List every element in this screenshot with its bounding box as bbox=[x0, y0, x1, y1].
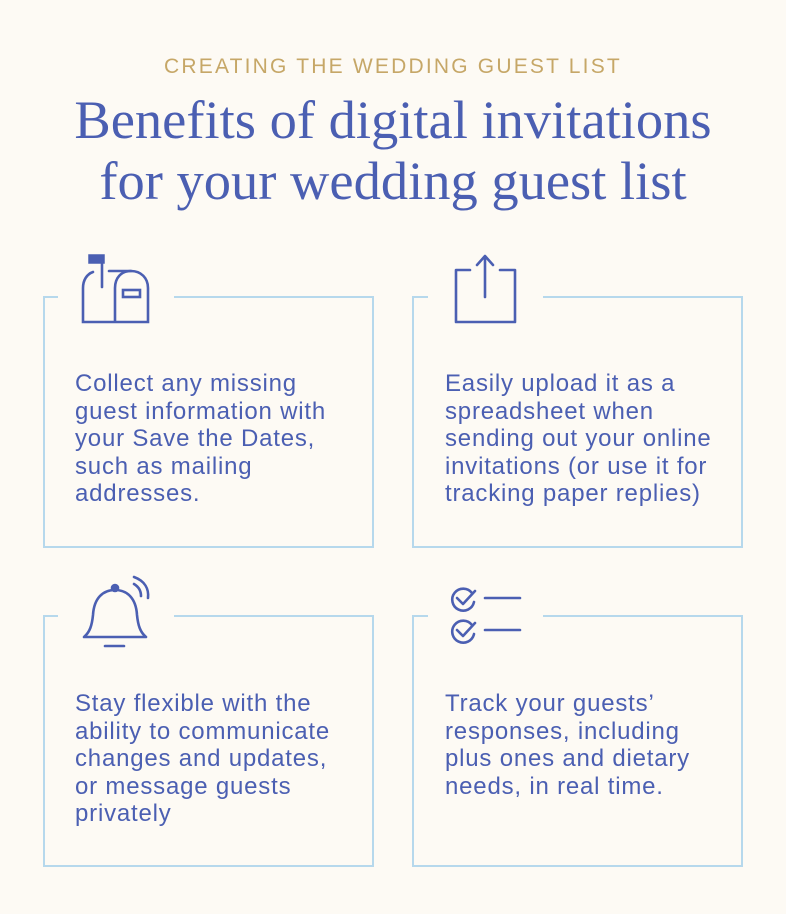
text: collect info bbox=[75, 370, 326, 507]
title bbox=[74, 89, 712, 211]
text: upload spreadsheet: invitations (or use it for bbox=[445, 453, 707, 480]
icon: checklist bbox=[452, 589, 520, 643]
text: track responses: responses, including bbox=[445, 718, 680, 745]
text: collect info: Collect any missing bbox=[75, 370, 297, 397]
text: collect info: such as mailing bbox=[75, 453, 252, 480]
subtitle: CREATING THE WEDDING GUEST LIST bbox=[164, 55, 622, 78]
icon: mailbox bbox=[83, 255, 148, 322]
text: stay flexible: Stay flexible with the bbox=[75, 690, 311, 717]
icon: upload bbox=[456, 256, 515, 322]
text: track responses: needs, in real time. bbox=[445, 773, 664, 800]
text: upload spreadsheet: spreadsheet when bbox=[445, 398, 654, 425]
text: upload spreadsheet: tracking paper replies) bbox=[445, 480, 701, 507]
text: stay flexible: changes and updates, bbox=[75, 745, 327, 772]
text: upload spreadsheet: sending out your online bbox=[445, 425, 712, 452]
text: collect info: guest information with bbox=[75, 398, 326, 425]
icon: bell bbox=[84, 577, 148, 646]
text: stay flexible: privately bbox=[75, 800, 172, 827]
text: stay flexible: ability to communicate bbox=[75, 718, 330, 745]
text: stay flexible: or message guests bbox=[75, 773, 291, 800]
text: upload spreadsheet bbox=[445, 370, 712, 507]
title: Benefits of digital invitations bbox=[74, 89, 712, 150]
text: track responses bbox=[445, 690, 690, 800]
text: track responses: Track your guests’ bbox=[445, 690, 655, 717]
text: upload spreadsheet: Easily upload it as a bbox=[445, 370, 675, 397]
title: for your wedding guest list bbox=[99, 150, 687, 211]
text: collect info: addresses. bbox=[75, 480, 200, 507]
text: collect info: your Save the Dates, bbox=[75, 425, 315, 452]
text: track responses: plus ones and dietary bbox=[445, 745, 690, 772]
text: stay flexible bbox=[75, 690, 330, 827]
